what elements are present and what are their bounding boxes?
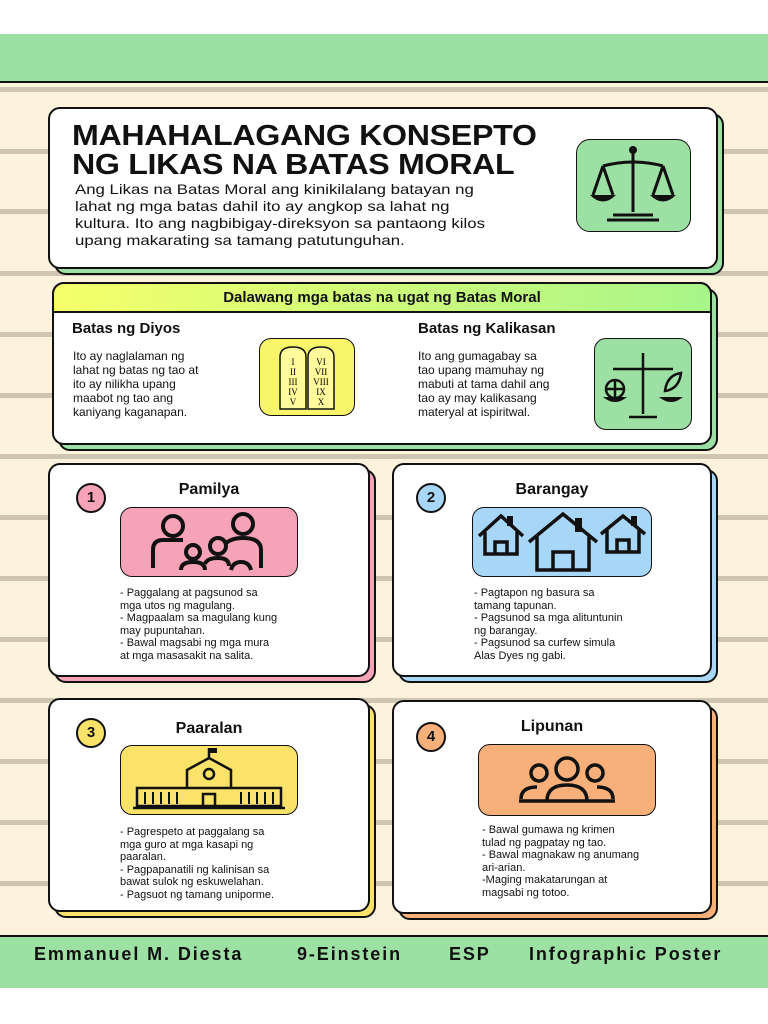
- text: Barangay: - Pagtapon ng basura sa: [474, 587, 594, 599]
- intro text: [75, 181, 485, 248]
- panel: 3 Paaralan: 3: [87, 724, 95, 741]
- text: Lipunan: - Bawal magnakaw ng anumang: [482, 849, 639, 861]
- intro text: Ang Likas na Batas Moral ang kinikilalang batayan ng: [75, 181, 474, 197]
- icon: tablets: VII: [315, 367, 327, 377]
- panel: two laws: tao upang mamuhay ng: [418, 363, 544, 377]
- panel: 2 Barangay: 2: [427, 489, 435, 506]
- icon: tablets: IX: [316, 387, 326, 397]
- panel: two laws: mabuti at tama dahil ang: [418, 377, 549, 391]
- footer text: Emmanuel M. Diesta: [34, 944, 243, 964]
- panel: two laws: ito ay nilikha upang: [73, 377, 176, 391]
- intro text: kultura. Ito ang nagbibigay-direksyon sa pantaong kilos: [75, 215, 485, 231]
- intro text: lahat ng mga batas dahil ito ay angkop sa lahat ng: [75, 198, 450, 214]
- icon: tablets: X: [318, 397, 325, 407]
- footer band: 9-Einstein: [297, 944, 402, 964]
- panel: two laws: Ito ang gumagabay sa: [418, 349, 537, 363]
- text: Barangay: ng barangay.: [474, 624, 537, 636]
- text: Lipunan: - Bawal gumawa ng krimen: [482, 824, 615, 836]
- panel: two laws: kaniyang kaganapan.: [73, 405, 187, 419]
- icon: people: [478, 744, 656, 816]
- text: Barangay: Alas Dyes ng gabi.: [474, 650, 566, 662]
- footer band: [0, 935, 768, 988]
- icon: tablets: [259, 338, 355, 416]
- text: Barangay: - Pagsunod sa mga alituntunin: [474, 612, 623, 624]
- text: Lipunan: -Maging makatarungan at: [482, 874, 607, 886]
- panel: two laws: maabot ng tao ang: [73, 391, 173, 405]
- panel: two laws: Ito ay naglalaman ng: [73, 349, 184, 363]
- text: Pamilya: mga utos ng magulang.: [120, 600, 235, 612]
- text: Pamilya: [120, 587, 277, 662]
- text: Lipunan: ari-arian.: [482, 862, 525, 874]
- panel: 1 Pamilya: [48, 463, 376, 683]
- text: Paaralan: [120, 826, 274, 900]
- title heading: NG LIKAS NA BATAS MORAL: [72, 149, 514, 181]
- icon: family: [120, 507, 298, 577]
- text: Barangay: [474, 587, 623, 662]
- title heading: [72, 120, 537, 181]
- text: Lipunan: [482, 824, 639, 898]
- title heading: MAHAHALAGANG KONSEPTO: [72, 120, 537, 152]
- icon: school: [120, 745, 298, 815]
- sub heading: Batas ng Kalikasan: Batas ng Kalikasan: [418, 320, 556, 337]
- text: Paaralan: bawat sulok ng eskuwelahan.: [120, 876, 264, 888]
- text: Paaralan: - Pagpapanatili ng kalinisan sa: [120, 864, 269, 876]
- panel: 2 Barangay: Barangay: [516, 481, 588, 498]
- text: Paaralan: paaralan.: [120, 851, 166, 863]
- top green band: [0, 34, 768, 83]
- panel: 1 Pamilya: 1: [87, 489, 95, 506]
- panel: 4 Lipunan: 4: [427, 728, 435, 745]
- icon: tablets: II: [290, 367, 296, 377]
- panel: 4 Lipunan: [392, 700, 718, 920]
- section header: Dalawang mga batas na ugat ng Batas Moral: [223, 289, 541, 306]
- panel: title: [48, 107, 724, 275]
- text: Barangay: - Pagsunod sa curfew simula: [474, 637, 615, 649]
- panel: 3 Paaralan: [48, 698, 376, 918]
- text: Pamilya: - Paggalang at pagsunod sa: [120, 587, 258, 599]
- icon: tablets: VIII: [313, 377, 329, 387]
- icon: tablets: III: [288, 377, 298, 387]
- text: Barangay: tamang tapunan.: [474, 600, 557, 612]
- intro text: upang makarating sa tamang patutunguhan.: [75, 232, 405, 248]
- panel: 4 Lipunan: Lipunan: [521, 718, 583, 735]
- text: Lipunan: tulad ng pagpatay ng tao.: [482, 836, 606, 848]
- panel: two laws: lahat ng batas ng tao at: [73, 363, 198, 377]
- text: Pamilya: - Bawal magsabi ng mga mura: [120, 637, 269, 649]
- panel: 2 Barangay: [392, 463, 718, 683]
- panel: 3 Paaralan: Paaralan: [176, 720, 242, 737]
- icon: tablets: IV: [288, 387, 298, 397]
- sub heading: Batas ng Diyos: Batas ng Diyos: [72, 320, 180, 337]
- icon: scale: [576, 139, 691, 232]
- footer band: Infographic Poster: [529, 944, 722, 964]
- panel: two laws: [52, 282, 718, 451]
- panel: two laws: materyal at ispiritwal.: [418, 405, 530, 419]
- panel: two laws: tao ay may kalikasang: [418, 391, 537, 405]
- icon: houses: [472, 507, 652, 577]
- icon: scale with globe: [594, 338, 692, 430]
- icon: tablets: V: [290, 397, 297, 407]
- section header: [52, 282, 712, 313]
- text: Pamilya: may pupuntahan.: [120, 624, 205, 636]
- text: Paaralan: - Pagsuot ng tamang uniporme.: [120, 888, 274, 900]
- text: Pamilya: at mga masasakit na salita.: [120, 650, 253, 662]
- footer band: ESP: [449, 944, 491, 964]
- panel: 1 Pamilya: Pamilya: [179, 481, 239, 498]
- icon: tablets: I: [292, 357, 294, 367]
- text: Pamilya: - Magpaalam sa magulang kung: [120, 612, 277, 624]
- text: Lipunan: magsabi ng totoo.: [482, 886, 569, 898]
- text: Paaralan: mga guro at mga kasapi ng: [120, 838, 253, 850]
- icon: tablets: VI: [316, 357, 326, 367]
- text: Paaralan: - Pagrespeto at paggalang sa: [120, 826, 264, 838]
